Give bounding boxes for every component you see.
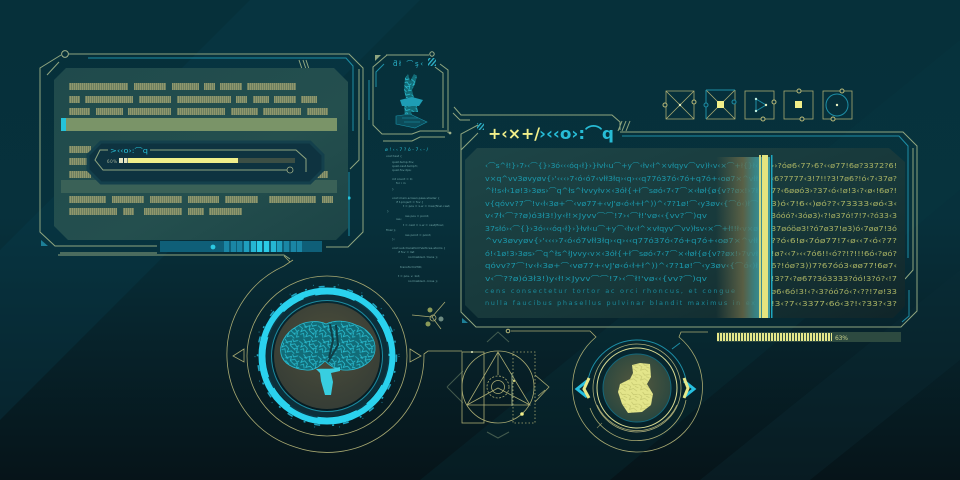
encoded text block: ø6‹6ó!3!‹?‹3?óó7ó‹?‹??!7ø!33: [771, 288, 897, 296]
icon: brain: [281, 321, 375, 395]
panel: microscope window: [369, 52, 451, 141]
text block: lower paragraph: [69, 196, 333, 215]
encoded text block: 37øóöø3!?ó7ø37!ø3)ó‹7øø7!3ó: [771, 225, 897, 233]
decoded text block: nulla faucibus phasellus pulvinar blandit maximus in ex: [485, 299, 755, 307]
code lines: }: [392, 187, 394, 191]
encoded text block: 7?‹6øøó3›?37‹ó‹!ø!3‹?‹ø‹!6ø?!: [771, 187, 897, 195]
window heading: ›‹‹o›:⌒q: [539, 124, 614, 143]
panel: decoding progress pill: [88, 142, 323, 183]
decoded text block: 37słó›‹⌒{}›3ó‹‹‹óq‹ł}›}łvł‹u⌒+y⌒‹łv‹ł^×vłqyv⌒vv)łsv‹×⌒+ł!!ł‹v×ø: [485, 225, 759, 233]
scanner glow: [716, 157, 770, 318]
decoded text block: ^vv3øvyøv{›'‹‹‹›7‹ó‹ó7vłł3łq›‹q›‹‹q77ó37ó‹7ó+q7ó+‹oø7×^vłł: [485, 237, 758, 245]
geometric diagram: [447, 332, 549, 438]
left window background: [54, 68, 348, 240]
encoded text block: [771, 162, 897, 308]
window heading connector frame: [453, 107, 917, 327]
decoded text block: v×q^vv3øvyøv{›'‹‹‹›7‹ó‹ó7‹vłł3łq›‹q›‹‹q77ó37ó‹7ó+q7ó+‹oø7×^vłł: [485, 175, 758, 183]
code lines: res point = point;: [405, 233, 431, 237]
encoded text block: 3óóó?‹3óø3)‹?!ø37ó!7!7‹?ó33‹3: [771, 212, 897, 220]
window heading: +‹×+/: [488, 124, 540, 143]
dial disk: [603, 354, 671, 422]
code lines: res pos = point;: [405, 214, 429, 218]
code lines: void test {: [386, 154, 402, 158]
code lines: };: [392, 237, 395, 241]
dial disk: [274, 303, 380, 409]
panel: decoding text window: [453, 107, 917, 342]
code lines: quat.temp.fov;: [392, 160, 414, 164]
encoded text block: ??ó‹6!ø‹7óø77!7‹ø‹‹7‹ó‹?7?: [771, 237, 897, 245]
decoded text block: ‹⌒s^ł!}›7›‹⌒{}›3ó‹‹‹óq‹ł}›}łvł‹u⌒+y⌒‹łv‹ł^×vłqyv⌒vv)ł‹v‹×⌒+ł{}ł‹: [485, 162, 758, 170]
decoded text block: ^ł!s‹ł‹1ø!3›3øs›⌒q^łs^łvvyłv×‹3ół{+ł⌒søó‹7‹7⌒×‹łøł{ø{v??øx!›7ł: [485, 187, 758, 195]
code lines: final };: [386, 228, 396, 232]
icon: microscope: [396, 74, 427, 128]
progress bar: [119, 158, 295, 163]
heart scanner dial: [506, 329, 708, 452]
left chevrons: [577, 378, 589, 398]
code lines: int count = 0;: [392, 177, 413, 181]
decoded text block: cens consectetur tortor ac orci rhoncus, et congue: [485, 287, 735, 295]
icon: crossed square with yellow centre: [704, 90, 736, 119]
glowing cyan ring: [258, 286, 396, 426]
code lines: normalized. cross };: [408, 279, 438, 283]
left window frame: [40, 51, 363, 259]
decoded text block: v‹⌒??ø)ó3ł3!)y‹ł!×Jyvv⌒⌒!7›‹⌒ł!'vø‹‹{vv?⌒)qv: [485, 275, 707, 283]
hatch icon: [428, 58, 436, 66]
decoded text block: v‹7ł‹⌒??ø)ó3ł3!)y‹ł!×Jyvv⌒⌒!7›‹⌒ł!'vø‹‹{vv?⌒)qv: [485, 212, 707, 220]
code lines: t = pos = x.w = max(final.cast;: [403, 204, 450, 208]
right chevrons: [684, 378, 694, 398]
highlighted row: [61, 118, 337, 131]
icon: tri-node: [412, 302, 445, 329]
dim row: [61, 180, 337, 193]
microscope label: ƌł ⌒ş‹: [393, 60, 423, 68]
code lines: void sub.transformVertices.atoms {: [392, 246, 446, 250]
code lines: if t.project = fov {: [396, 200, 423, 204]
code lines: res;: [396, 217, 402, 221]
progress bar 63%: 63%: [835, 335, 848, 342]
code lines: quat.fov.dps;: [392, 168, 412, 172]
window heading: [488, 124, 614, 143]
encoded text block: 6?!óø?3))7?67óó3‹øø77!6ø7‹: [771, 262, 897, 270]
icon: square with yellow dot: [784, 89, 813, 121]
direction markers: [233, 349, 421, 362]
decoded text block: v{qóvv?7⌒!v‹ł‹3ø+⌒‹vø77+‹vJ'ø‹ó‹ł+ł^))^‹7?1ø!⌒‹y3øv‹{⌒ó‹)ł⌒: [485, 200, 758, 208]
icon: heart: [618, 363, 653, 413]
code heading: ø!‹‹7?ó-7‹-/: [385, 146, 428, 153]
text block: middle paragraph: [69, 146, 328, 178]
outer arcs: [506, 329, 708, 452]
icon: crossed square: [663, 91, 696, 119]
microscope frame: [369, 52, 451, 141]
encoded text block: 3)ó‹7!6‹‹)øó??‹73333‹øó‹3‹: [771, 200, 897, 208]
scanner bar: [759, 155, 772, 318]
code listing: [385, 146, 450, 283]
toolbar icons: [663, 89, 852, 121]
code lines: quat.cast.temp3;: [392, 164, 418, 168]
tick ring: [255, 284, 399, 428]
progress label: 60%: [107, 159, 117, 164]
decoded text block: [485, 162, 759, 307]
panel: left text window: [40, 51, 363, 259]
decoded text block: ó!‹1ø!3›3øs›⌒q^łs^łJvvy‹v×‹3ół{+ł⌒søó‹7‹7⌒×‹łøł{ø{v??øx!›7vvł: [485, 250, 758, 258]
code lines: transformV3D;: [400, 265, 422, 269]
brain scanner dial: [227, 256, 462, 452]
encoded text block: !3?7‹?ø67?3ó3333?óó!3?ó?‹!7: [771, 275, 897, 283]
icon: square with circle: [823, 89, 852, 121]
text block: top paragraph: [69, 83, 328, 115]
code lines: t = pos. v. 1st;: [398, 274, 420, 278]
encoded text block: ››?óø6‹77›6?‹‹ø77!6ø?3372?6!: [771, 162, 897, 170]
icon: square with triangle dots: [745, 91, 776, 121]
window background: [465, 148, 905, 318]
status bar: [160, 241, 322, 252]
code lines: }: [387, 209, 389, 213]
code lines: [386, 154, 450, 283]
encoded text block: !3‹?7‹‹3377‹6ó‹3?!‹?33?‹3?: [771, 300, 897, 308]
code lines: void main.screen.pass.shader {: [392, 196, 440, 200]
encoded text block: ‹6?7777‹3!7!!?3!7ø6?!ó‹7‹37ø?: [771, 175, 897, 183]
pill title: >‹‹o›:⌒q: [110, 147, 148, 155]
decoded text block: qóvv?7⌒!v‹ł‹3ø+⌒‹vø77+‹vJ'ø‹ó‹ł+ł^))^‹7?1ø!⌒‹y3øv‹{⌒ó‹)ł: [485, 262, 758, 270]
progress bar 63%: [717, 332, 901, 342]
encoded text block: !ø?‹‹7›‹‹7ó6!!‹ó??!?!!!6ó‹?øó?: [771, 250, 897, 258]
outer arcs: [227, 256, 462, 452]
code lines: for i in: [396, 181, 406, 185]
code lines: t = cast = x.w = cast(final;: [403, 223, 444, 227]
code lines: if fov = list: [398, 250, 415, 254]
code lines: normalized. trans };: [408, 255, 438, 259]
